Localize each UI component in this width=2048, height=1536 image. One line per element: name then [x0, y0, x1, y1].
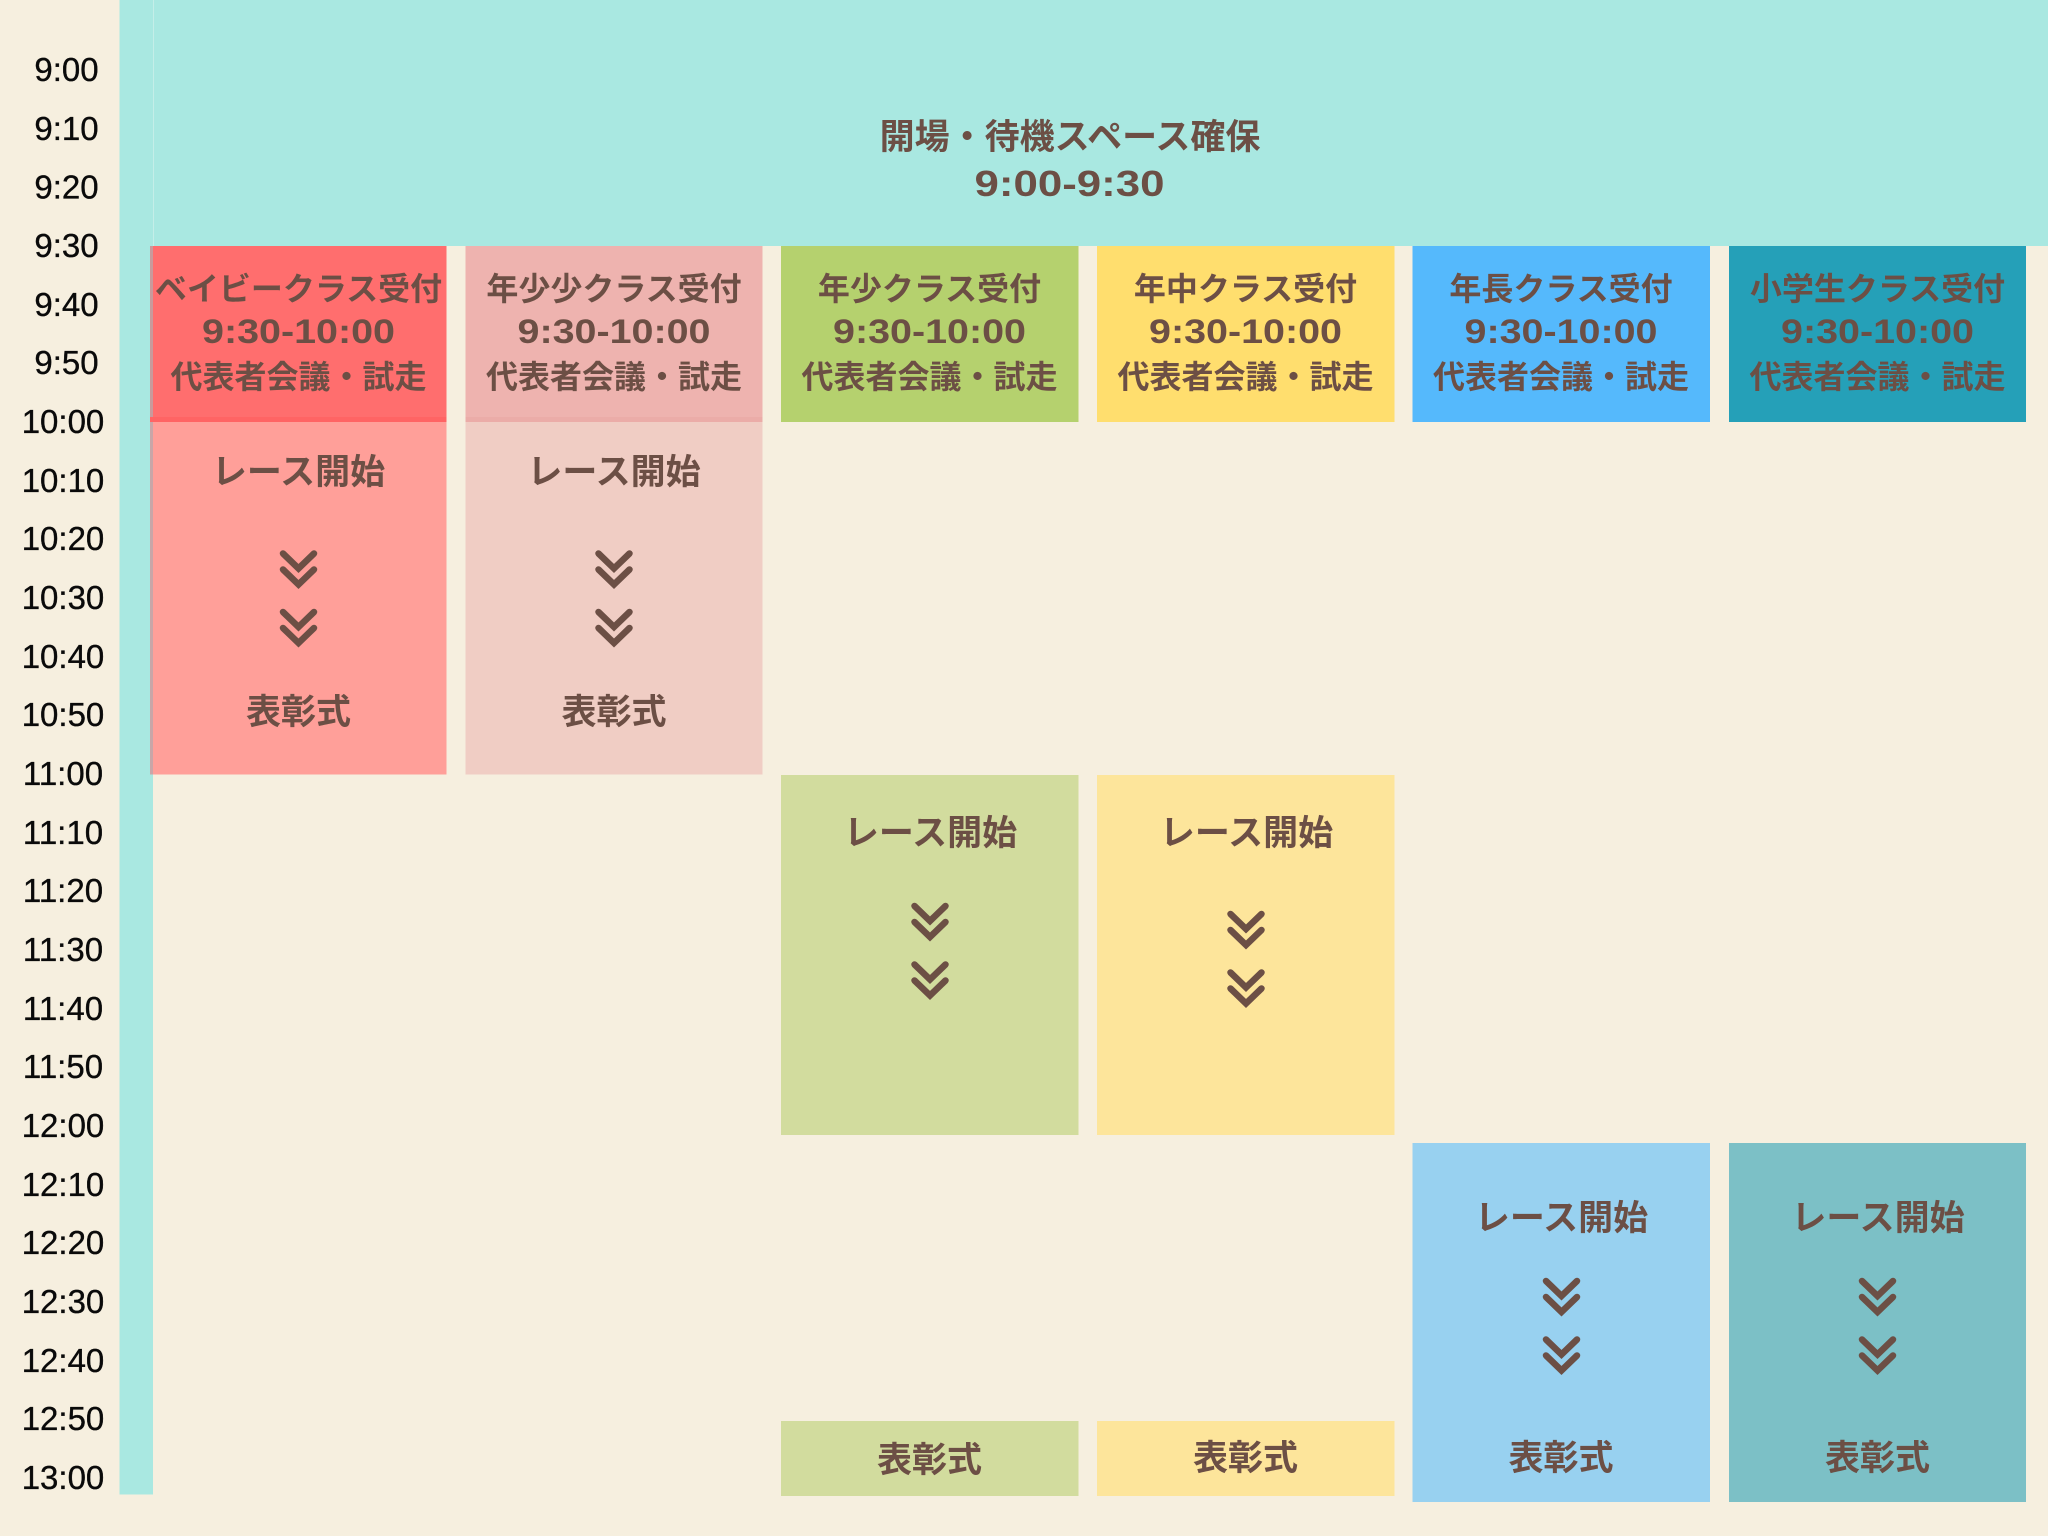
panel: senior class reception: [1412, 246, 1710, 422]
panel: middle class reception: 9:30-10:00: [1149, 313, 1342, 351]
panel: younger nursery class race: レース開始: [527, 453, 701, 492]
panel: middle class award: [1097, 1421, 1394, 1496]
panel: elementary class race and award: 表彰式: [1825, 1439, 1930, 1478]
time axis labels: 11:10: [23, 814, 103, 851]
panel: baby class reception: [150, 246, 446, 422]
panel: elementary class reception: 9:30-10:00: [1781, 313, 1974, 351]
panel: senior class race and award: レース開始: [1475, 1199, 1648, 1238]
panel: elementary class reception: 小学生クラス受付: [1750, 271, 2005, 307]
panel: opening and waiting space: [153, 0, 2048, 246]
time axis labels: 11:40: [23, 990, 103, 1027]
panel: baby class race: レース開始: [212, 453, 385, 492]
panel: senior class reception: 9:30-10:00: [1464, 313, 1658, 351]
time axis labels: 11:00: [23, 755, 103, 792]
panel: elementary class reception: [1729, 246, 2026, 422]
panel: baby class race: 表彰式: [246, 693, 351, 732]
icon: double chevrons: [598, 554, 630, 643]
panel: opening and waiting space: 開場・待機スペース確保: [880, 118, 1260, 157]
panel: younger nursery class reception: 代表者会議・試走: [486, 359, 742, 395]
panel: baby class reception: ベイビークラス受付: [155, 271, 442, 307]
panel: opening and waiting space: 9:00-9:30: [974, 163, 1164, 204]
time axis labels: 10:00: [22, 403, 104, 440]
panel: senior class race and award: [1412, 1143, 1710, 1502]
panel: younger nursery class reception: 9:30-10:00: [518, 313, 710, 351]
panel: nursery class reception: 9:30-10:00: [833, 313, 1026, 351]
panel: younger nursery class reception: [466, 246, 762, 422]
panel: younger nursery class reception: 年少少クラス受付: [486, 271, 742, 307]
time axis labels: 10:40: [22, 638, 104, 675]
panel: middle class award: 表彰式: [1193, 1439, 1298, 1478]
panel: elementary class reception: 代表者会議・試走: [1749, 359, 2006, 395]
time axis labels: 13:00: [22, 1459, 104, 1496]
panel: senior class race and award: 表彰式: [1508, 1439, 1614, 1478]
time axis labels: 9:10: [34, 110, 99, 147]
panel: nursery class reception: [781, 246, 1078, 422]
time axis labels: 9:00: [34, 51, 99, 88]
panel: baby class race: [150, 422, 446, 774]
panel: senior class reception: 年長クラス受付: [1449, 271, 1673, 307]
panel: younger nursery class race: 表彰式: [561, 693, 667, 732]
time axis labels: 11:20: [23, 872, 103, 909]
time axis labels: 9:20: [34, 168, 99, 206]
time axis labels: 10:10: [22, 462, 104, 499]
panel: middle class reception: [1097, 246, 1394, 422]
panel: nursery class award: [781, 1421, 1078, 1496]
panel: baby class reception: 9:30-10:00: [202, 313, 395, 351]
time axis labels: 12:00: [22, 1107, 104, 1144]
time axis labels: 12:40: [22, 1342, 104, 1379]
time axis labels: 9:30: [34, 227, 99, 264]
icon: double chevrons: [1862, 1281, 1893, 1370]
time axis labels: 12:30: [22, 1283, 104, 1320]
time axis labels: 11:30: [23, 931, 103, 968]
panel: nursery class award: 表彰式: [877, 1441, 982, 1480]
icon: double chevrons: [1546, 1281, 1577, 1370]
time axis labels: 10:30: [22, 579, 104, 616]
time axis labels: 9:40: [34, 286, 99, 323]
panel: middle class race: [1097, 775, 1394, 1135]
time axis labels: 11:50: [23, 1048, 103, 1085]
time axis labels: 9:50: [34, 344, 99, 381]
panel: younger nursery class race: [466, 422, 762, 774]
panel: middle class race: レース開始: [1160, 814, 1333, 853]
time axis labels: 12:20: [22, 1224, 104, 1261]
panel: elementary class race and award: [1729, 1143, 2026, 1502]
time axis labels: 10:50: [22, 696, 104, 733]
time axis labels: 10:20: [22, 520, 104, 557]
panel: senior class reception: 代表者会議・試走: [1433, 359, 1689, 395]
panel: elementary class race and award: レース開始: [1791, 1199, 1965, 1238]
panel: nursery class race: [781, 775, 1078, 1135]
time axis bar: [120, 0, 153, 1494]
panel: nursery class reception: 代表者会議・試走: [801, 359, 1058, 395]
time axis labels: [22, 51, 104, 1496]
time axis labels: 12:10: [22, 1166, 104, 1203]
time axis labels: 12:50: [22, 1400, 104, 1437]
panel: middle class reception: 代表者会議・試走: [1117, 359, 1374, 395]
panel: middle class reception: 年中クラス受付: [1134, 271, 1357, 307]
icon: double chevrons: [914, 906, 946, 996]
panel: nursery class reception: 年少クラス受付: [818, 271, 1041, 307]
icon: double chevrons: [283, 554, 314, 643]
panel: nursery class race: レース開始: [844, 814, 1017, 853]
icon: double chevrons: [1230, 914, 1262, 1004]
panel: baby class reception: 代表者会議・試走: [170, 359, 427, 395]
